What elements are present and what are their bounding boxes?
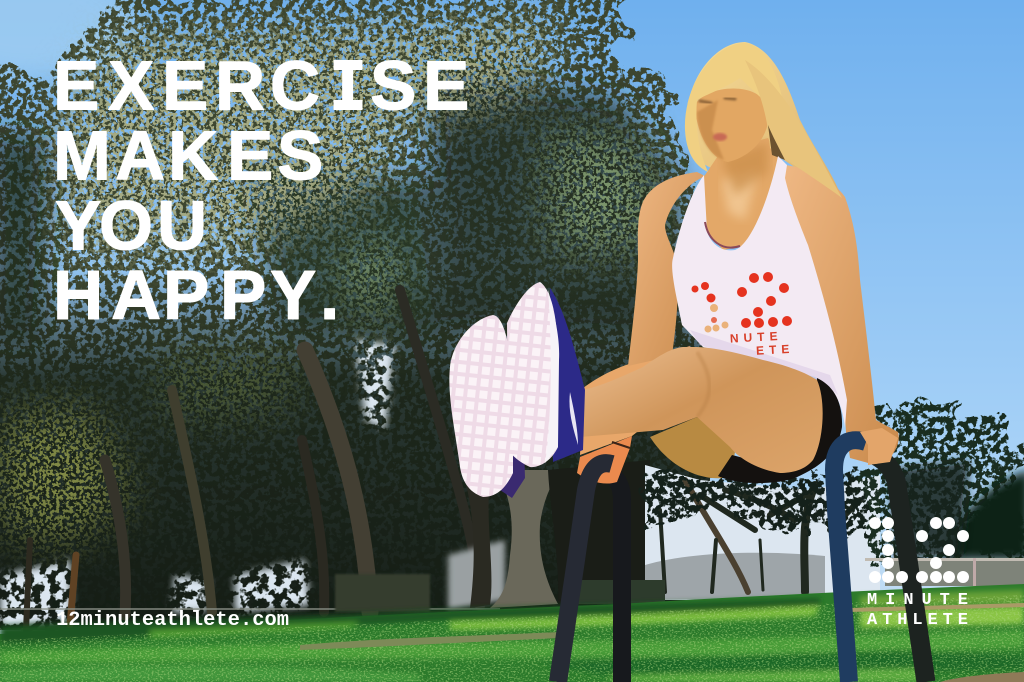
grass lawn [0,584,1024,682]
headline I slab serifs [334,60,362,110]
long hair strand [745,60,842,198]
front left dip bar [558,463,612,682]
neck shadow [722,142,768,195]
chain link fence [0,558,1024,612]
lips [713,133,727,141]
shirt shading [690,330,838,395]
logo word minute: MINUTE [867,591,968,610]
headline [53,46,469,334]
right shoulder and arm [783,165,899,464]
face [695,88,769,162]
white tank top [672,156,847,428]
near hand gripping bar [577,436,632,484]
black shorts [718,378,842,483]
tree canopy [0,0,710,630]
headline line 2: MAKES [53,116,323,194]
brand logo [867,517,969,630]
near shoe [507,282,585,467]
far forearm and lower leg [580,346,690,455]
left arm [628,172,705,366]
face shadow [697,100,724,160]
tree trunks [26,290,480,630]
front right dip bar [834,440,866,682]
hair fringe [685,43,786,172]
sky gaps between lower trees [0,340,395,630]
pale sky glow top left [0,0,140,80]
right side tree [865,404,1024,565]
neckline trim [705,222,740,248]
far shoe [449,315,525,498]
right hand fingers [860,428,898,465]
lower dark forest [0,270,710,630]
far dip bars [598,450,926,682]
big trunk behind shoes [448,460,650,610]
eyes [700,98,735,103]
shirt red logo dots [692,272,792,332]
far thigh [650,417,735,478]
logo word athlete: ATHLETE [867,611,968,630]
neck and chest [703,138,782,250]
headline line 3: YOU [55,186,207,264]
logo dots [869,517,969,583]
knee crease [697,352,709,417]
near leg [580,347,823,473]
hair shadow [768,125,785,160]
chest highlight [722,170,758,220]
website url: 12minuteathlete.com [56,609,289,632]
shirt text athlete: ETE [756,342,795,358]
shirt text minute: NUTE [730,329,783,346]
athlete [580,42,899,483]
distant hills and sky gap [645,465,880,600]
hair back [686,42,842,198]
headline line 1: EXERCISE [53,46,469,124]
headline line 4: HAPPY. [53,256,339,334]
